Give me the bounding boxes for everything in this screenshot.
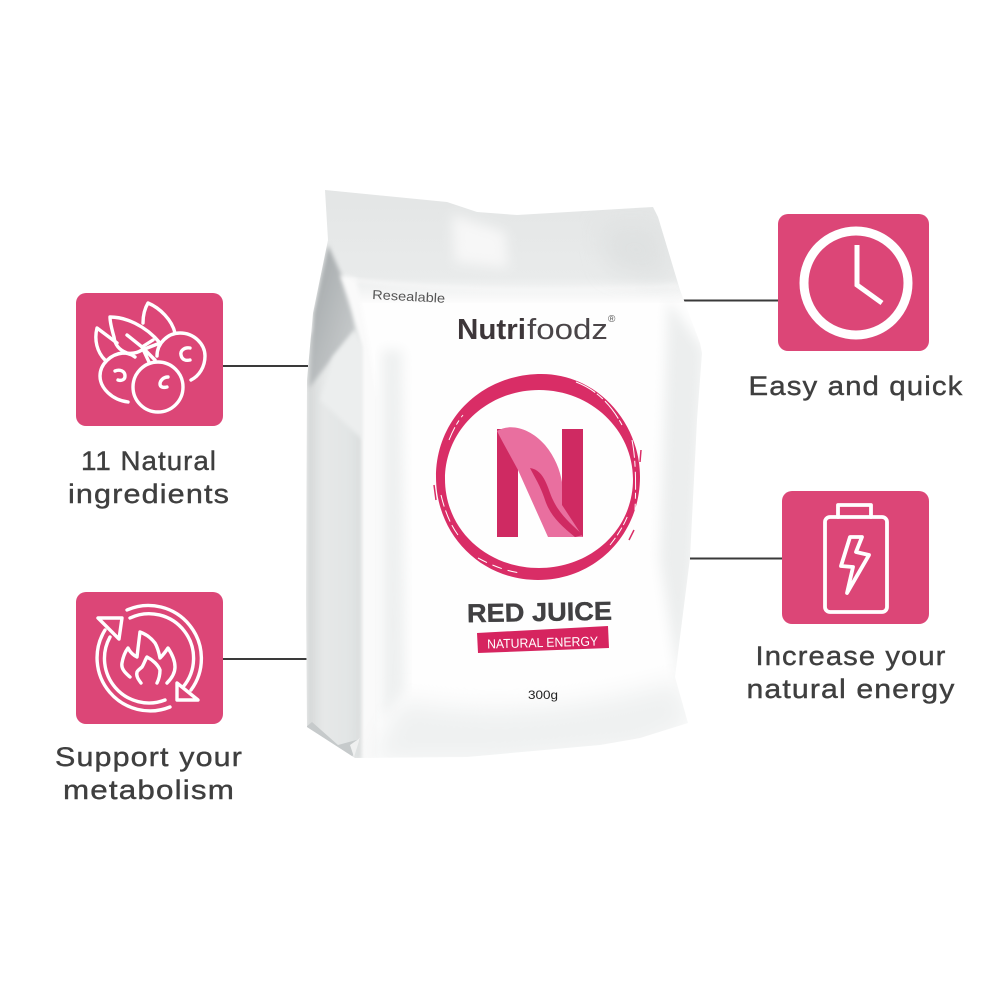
icon tile: clock	[778, 214, 929, 351]
panel: metabolism	[55, 592, 243, 805]
brand logo: Nutri	[457, 314, 526, 346]
panel: natural energy: natural energy	[746, 674, 956, 704]
product name: RED JUICE	[467, 596, 612, 628]
weight: 300g	[528, 688, 558, 702]
icon tile: berries	[76, 293, 223, 426]
label: Support your	[55, 742, 243, 772]
panel: 11 natural ingredients	[68, 293, 230, 509]
panel: natural energy	[746, 491, 956, 704]
brand logo: foodz	[527, 314, 608, 346]
panel: 11 natural ingredients: ingredients	[68, 479, 230, 509]
text: resealable: Resealable	[372, 287, 446, 306]
natural energy badge	[477, 626, 609, 653]
registered mark: ®	[608, 314, 616, 325]
natural energy badge: NATURAL ENERGY	[487, 634, 599, 651]
N logo letter	[497, 427, 583, 537]
label: 11 Natural	[81, 446, 217, 476]
logo ring	[434, 374, 641, 580]
icon tile: battery	[782, 491, 929, 624]
bag body	[300, 185, 710, 765]
panel: easy and quick	[748, 214, 964, 401]
brand logo	[457, 314, 608, 346]
icon tile: flame cycle	[76, 592, 223, 724]
connector lines	[222, 300, 782, 659]
product bag	[300, 185, 710, 765]
panel: metabolism: metabolism	[63, 775, 235, 805]
label: Easy and quick	[748, 371, 964, 401]
label: Increase your	[756, 641, 946, 671]
